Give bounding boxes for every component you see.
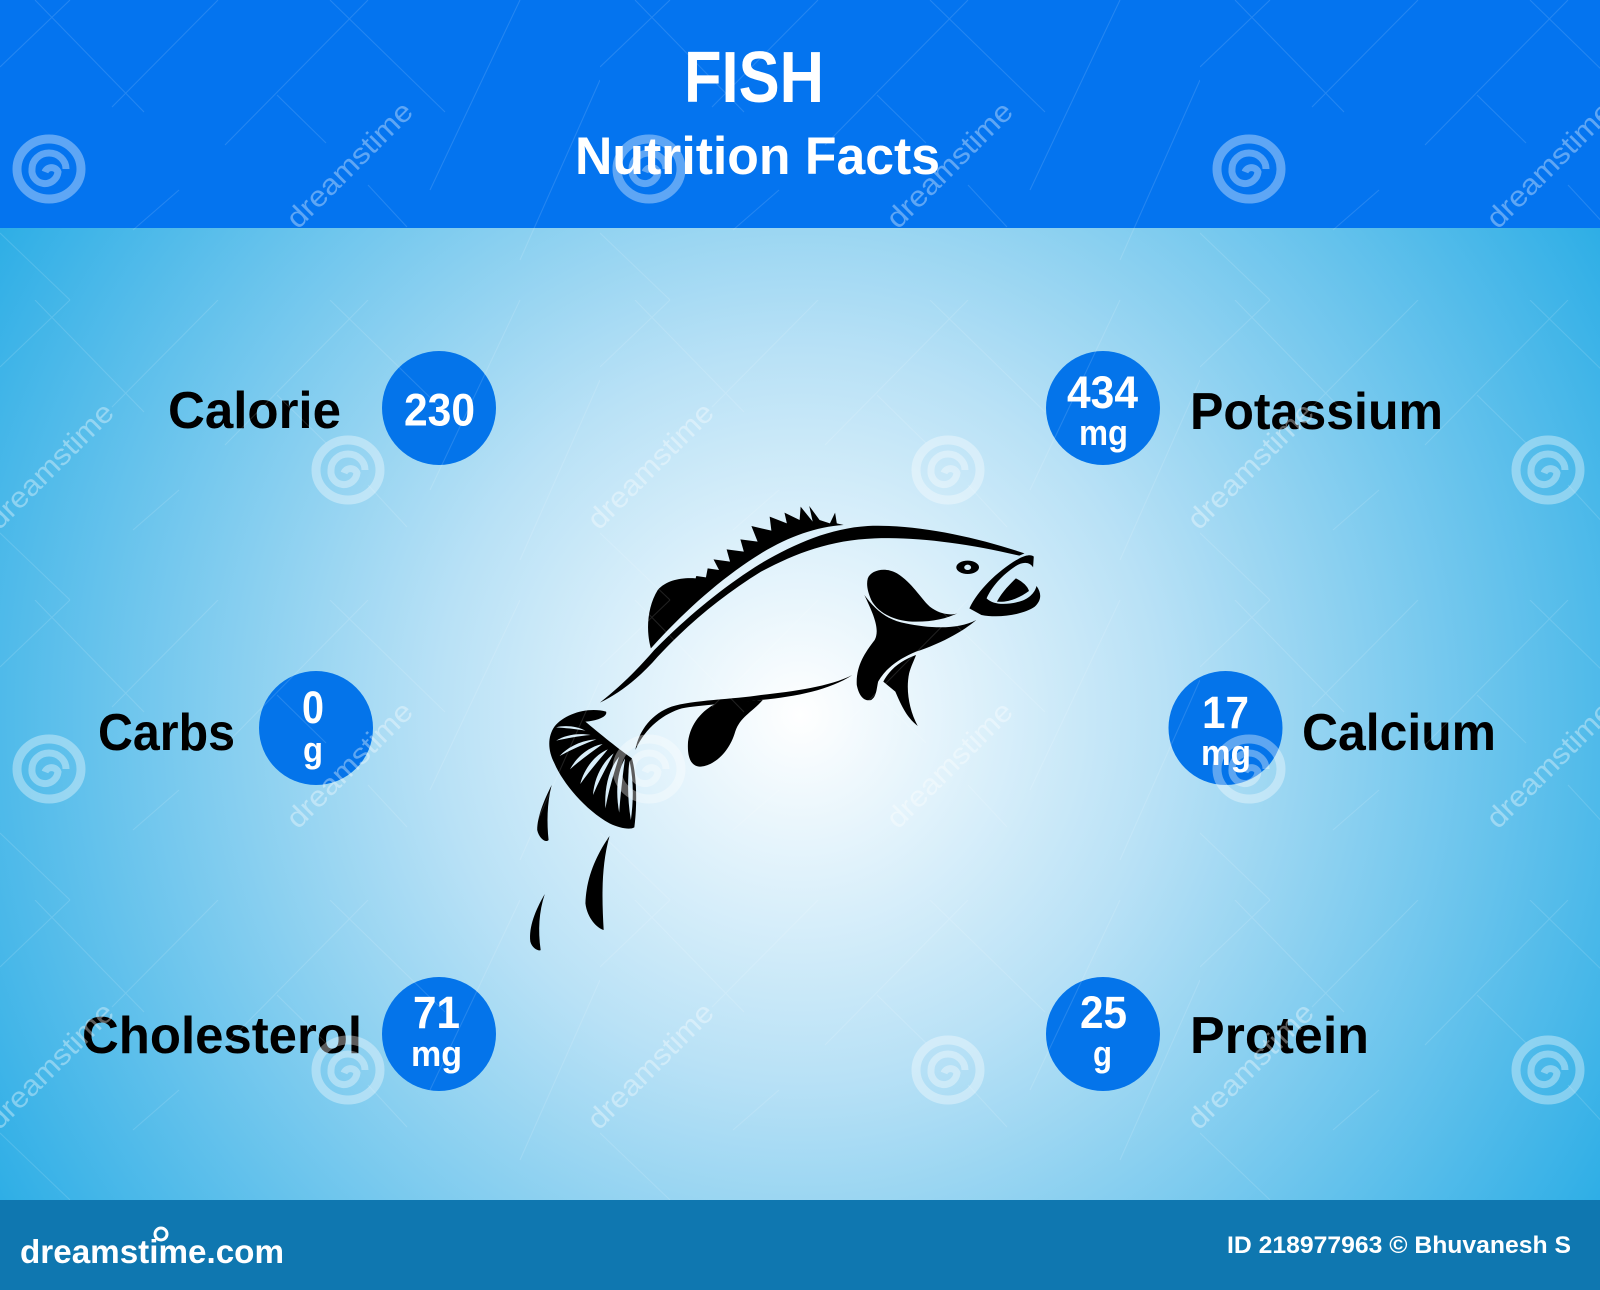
item: cholesterol bbox=[82, 977, 496, 1091]
mouth bbox=[969, 555, 1040, 616]
dorsal fin bbox=[648, 506, 844, 648]
background gradient panel bbox=[0, 228, 1600, 1200]
gill and belly fin bbox=[857, 595, 976, 700]
item: calcium: 17 bbox=[1202, 687, 1249, 738]
watermark overlay: dreamstime bbox=[280, 96, 420, 235]
header band bbox=[0, 0, 1600, 228]
image credit: ID 218977963 © Bhuvanesh S bbox=[1227, 1232, 1571, 1259]
footer band bbox=[0, 1200, 1600, 1290]
item: potassium: mg bbox=[1079, 412, 1128, 453]
item: calcium: Calcium bbox=[1302, 704, 1496, 762]
fish back line bbox=[600, 526, 1024, 703]
item: potassium: 434 bbox=[1067, 367, 1138, 418]
watermark overlay: dreamstime bbox=[1181, 397, 1321, 536]
item: calorie: 230 bbox=[404, 384, 475, 436]
item: cholesterol: Cholesterol bbox=[82, 1007, 362, 1065]
tongue bbox=[997, 578, 1029, 602]
subtitle: Nutrition Facts bbox=[575, 127, 940, 186]
item: calcium bbox=[1168, 671, 1496, 785]
item: calorie: Calorie bbox=[168, 382, 341, 440]
item: carbs: g bbox=[303, 729, 323, 770]
pectoral fin bbox=[867, 570, 957, 622]
item: calcium: mg bbox=[1201, 732, 1251, 773]
watermark overlay: dreamstime bbox=[280, 696, 420, 835]
title: FISH bbox=[684, 38, 824, 118]
item: carbs: 0 bbox=[302, 682, 324, 733]
icon: footer spiral bbox=[155, 1228, 167, 1240]
anal fin bbox=[688, 700, 763, 767]
item: protein: Protein bbox=[1190, 1007, 1369, 1065]
icon: leaping fish bbox=[530, 506, 1040, 950]
belly line bbox=[635, 675, 852, 750]
item: potassium: Potassium bbox=[1190, 383, 1443, 441]
water droplets bbox=[530, 785, 610, 950]
item: protein: g bbox=[1093, 1033, 1112, 1074]
watermark overlay: dreamstime bbox=[581, 997, 721, 1136]
lower fin bbox=[883, 655, 918, 726]
item: carbs: Carbs bbox=[98, 704, 235, 762]
footer logo text: dreamstime.com bbox=[20, 1233, 284, 1270]
watermark overlay: dreamstime bbox=[581, 397, 721, 536]
item: carbs bbox=[98, 671, 373, 785]
item: calorie bbox=[168, 351, 496, 465]
item: potassium bbox=[1046, 351, 1443, 465]
tail bbox=[549, 710, 636, 829]
watermark overlay: dreamstime bbox=[880, 96, 1020, 235]
item: protein: 25 bbox=[1080, 987, 1127, 1038]
watermark overlay: dreamstime bbox=[1181, 997, 1321, 1136]
item: cholesterol: 71 bbox=[413, 987, 460, 1038]
watermark overlay: dreamstime bbox=[880, 696, 1020, 835]
eye bbox=[956, 561, 979, 574]
item: cholesterol: mg bbox=[411, 1033, 462, 1074]
item: protein bbox=[1046, 977, 1369, 1091]
